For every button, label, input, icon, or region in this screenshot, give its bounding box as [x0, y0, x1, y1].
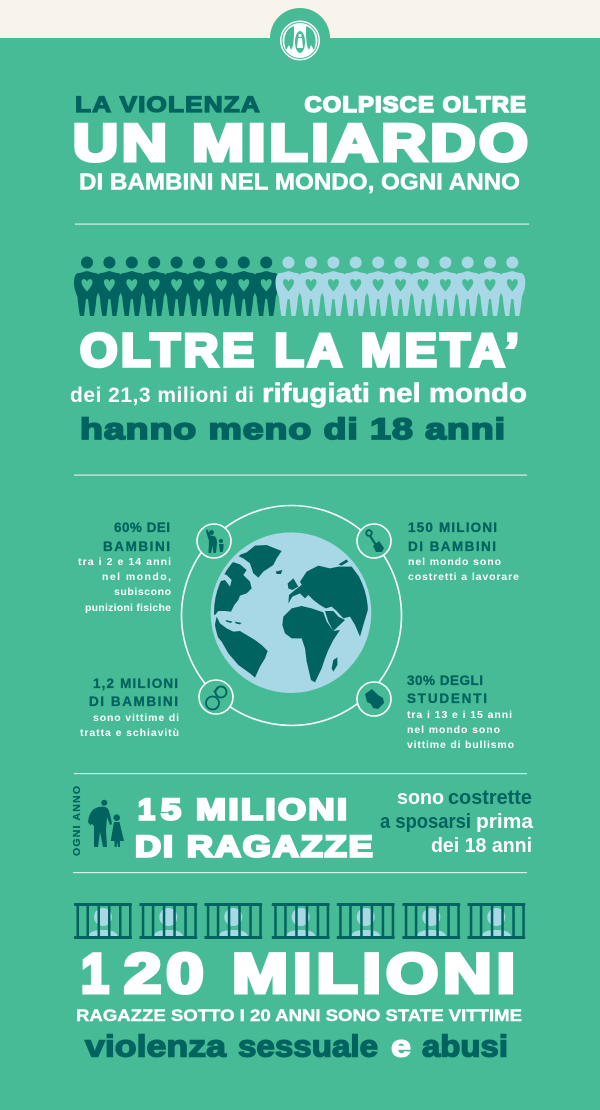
rotated label: OGNI ANNO [71, 786, 83, 856]
side text [380, 787, 534, 857]
icon: adult and girl [88, 800, 124, 847]
heading: 1 [138, 794, 155, 826]
closing statement: e [391, 1028, 411, 1064]
title: COLPISCE OLTRE [304, 92, 526, 117]
top cream band [0, 0, 600, 38]
stat: trafficking: tratta e schiavitù [80, 727, 179, 739]
globe [210, 532, 371, 693]
heading [135, 793, 373, 864]
stat: child labour [408, 520, 519, 583]
side text: a sposarsi [380, 811, 471, 833]
refugees heading [70, 324, 527, 446]
people row: 9 dark and 11 light [74, 256, 525, 316]
refugees heading: hanno meno di 18 anni [80, 412, 505, 446]
heading: DI RAGAZZE [135, 830, 373, 864]
stat: child labour: DI BAMBINI [408, 539, 496, 554]
stat: bullying [407, 673, 514, 751]
side text: dei 18 anni [431, 835, 532, 857]
logo badge [270, 8, 330, 68]
cages row [74, 903, 525, 939]
closing statement: RAGAZZE SOTTO I 20 ANNI SONO STATE VITTIME [76, 1006, 522, 1025]
heading: 5 MILIONI [161, 793, 347, 827]
closing statement [76, 942, 522, 1064]
side text: costrette [448, 787, 532, 809]
stat: bullying: 30% DEGLI [407, 673, 483, 688]
title [73, 92, 528, 194]
title: UN MILIARDO [73, 114, 528, 172]
stat: punishment: subiscono [114, 586, 171, 598]
closing statement: 20 MILIONI [124, 943, 515, 1005]
stat: bullying: nel mondo sono [407, 724, 500, 736]
stat: punishment: BAMBINI [103, 539, 170, 554]
refugees heading: OLTRE LA META’ [80, 324, 519, 376]
icon: fist [357, 682, 391, 716]
closing statement: violenza [85, 1028, 227, 1064]
child marriage section [71, 786, 534, 864]
stat: trafficking: sono vittime di [93, 712, 179, 724]
stat: bullying: STUDENTI [407, 691, 487, 706]
stat: child labour: 150 MILIONI [408, 520, 497, 535]
refugees heading: rifugiati nel mondo [262, 378, 527, 408]
stat: punishment [78, 520, 171, 614]
refugees heading: dei 21,3 milioni di [70, 384, 254, 407]
side text: prima [476, 811, 534, 833]
side text: sono [397, 787, 444, 809]
stat: bullying: vittime di bullismo [407, 739, 514, 751]
stat: punishment: 60% DEI [114, 520, 170, 535]
closing statement: sessuale [238, 1028, 378, 1064]
closing statement: 1 [81, 942, 109, 1004]
icon: handcuffs [199, 680, 233, 714]
stat: bullying: tra i 13 e i 15 anni [407, 709, 512, 721]
icon: shovel [357, 524, 391, 558]
stat: trafficking [80, 676, 179, 739]
stat: child labour: costretti a lavorare [408, 571, 519, 583]
stat: child labour: nel mondo sono [408, 556, 501, 568]
orbit ring [182, 506, 402, 726]
title: DI BAMBINI NEL MONDO, OGNI ANNO [79, 168, 520, 194]
stat: punishment: tra i 2 e 14 anni [78, 556, 171, 568]
stat: trafficking: DI BAMBINI [89, 694, 178, 709]
title: LA VIOLENZA [75, 93, 260, 117]
closing statement: abusi [422, 1028, 508, 1064]
stat: trafficking: 1,2 MILIONI [93, 676, 178, 691]
stat: punishment: punizioni fisiche [85, 602, 171, 614]
globe diagram [78, 506, 519, 751]
stat: punishment: nel mondo, [102, 571, 171, 583]
icon: punishment [197, 524, 231, 558]
